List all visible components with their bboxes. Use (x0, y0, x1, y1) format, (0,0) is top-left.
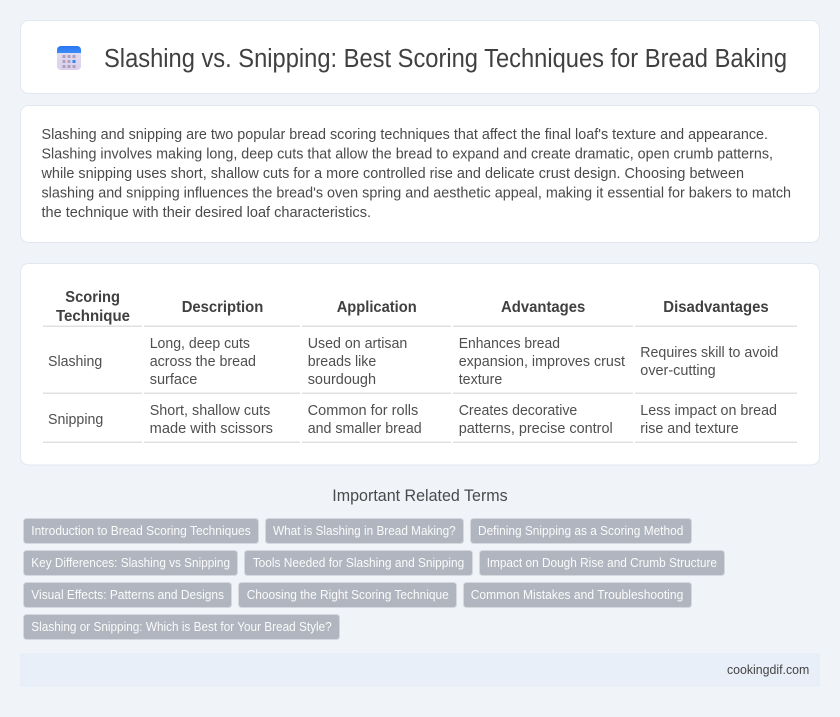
table row: snipping: Common for rolls (308, 403, 418, 419)
text block: introduction paragraph: the technique with their desired loaf characteristics. (42, 205, 371, 221)
table row: snipping (48, 403, 777, 437)
table row: slashing: Long, deep cuts (150, 336, 250, 352)
table row: snipping: made with scissors (150, 421, 273, 437)
footer source text: cookingdif.com (727, 662, 809, 677)
table row: slashing: Requires skill to avoid (640, 345, 778, 361)
table header row: Scoring (65, 289, 120, 306)
panel: introduction (20, 106, 820, 242)
table row: slashing: across the bread (150, 354, 256, 370)
table row: slashing (48, 336, 778, 388)
related term tags: Defining Snipping as a Scoring Method (478, 524, 683, 538)
text block: introduction paragraph: Slashing and snipping are two popular bread scoring techniques that affect the final loaf's texture and appearance. (42, 127, 768, 143)
table header row: Disadvantages (663, 299, 769, 316)
related term tags: What is Slashing in Bread Making? (273, 524, 456, 538)
footer bar (20, 653, 820, 687)
table row: snipping: Creates decorative (459, 403, 577, 419)
table row: snipping: rise and texture (640, 421, 739, 437)
table row: slashing: Enhances bread (459, 336, 560, 352)
table row: slashing: Slashing (48, 354, 102, 370)
table row: snipping: patterns, precise control (459, 421, 613, 437)
related term tags: Impact on Dough Rise and Crumb Structure (487, 556, 717, 570)
table row: slashing: texture (459, 372, 502, 388)
related term tags: Key Differences: Slashing vs Snipping (31, 556, 230, 570)
table header row: Technique (56, 308, 130, 325)
table header row: Description (182, 299, 263, 316)
table row: snipping: Short, shallow cuts (150, 403, 270, 419)
related term tags: Common Mistakes and Troubleshooting (471, 588, 683, 602)
table header row (56, 289, 769, 325)
related term tags (24, 518, 724, 640)
title: Slashing vs. Snipping: Best Scoring Techniques for Bread Baking (104, 45, 787, 73)
table row: slashing: surface (150, 372, 197, 388)
text block: introduction paragraph: Slashing involves making long, deep cuts that allow the bread to expand and create dramatic, open crumb patterns, (42, 146, 773, 162)
table header row: Advantages (501, 299, 585, 316)
table row: snipping: and smaller bread (308, 421, 422, 437)
table row: slashing: breads like (308, 354, 376, 370)
related term tags: Visual Effects: Patterns and Designs (31, 588, 224, 602)
text block: introduction paragraph: while snipping uses short, shallow cuts for a more controlled rise and delicate crust design. Choosing between (41, 166, 744, 182)
heading: important related terms: Important Related Terms (332, 487, 508, 505)
related term tags: Slashing or Snipping: Which is Best for Your Bread Style? (31, 620, 332, 634)
panel: title header (20, 20, 820, 94)
table row: slashing: Used on artisan (308, 336, 407, 352)
icon: calendar (57, 46, 81, 70)
text block: introduction paragraph: slashing and snipping influences the bread's oven spring and aesthetic appeal, making it essential for bakers to match (42, 186, 791, 202)
table row: slashing: over-cutting (640, 363, 716, 379)
related term tags: Introduction to Bread Scoring Techniques (31, 524, 251, 538)
table row: slashing: sourdough (308, 372, 376, 388)
table row: slashing: expansion, improves crust (459, 354, 625, 370)
table row: snipping: Less impact on bread (640, 403, 777, 419)
panel: comparison table (20, 264, 820, 465)
related term tags: Tools Needed for Slashing and Snipping (253, 556, 464, 570)
text block: introduction paragraph (41, 127, 791, 221)
table row: snipping: Snipping (48, 412, 103, 428)
related term tags: Choosing the Right Scoring Technique (247, 588, 449, 602)
table header row: Application (337, 299, 417, 316)
